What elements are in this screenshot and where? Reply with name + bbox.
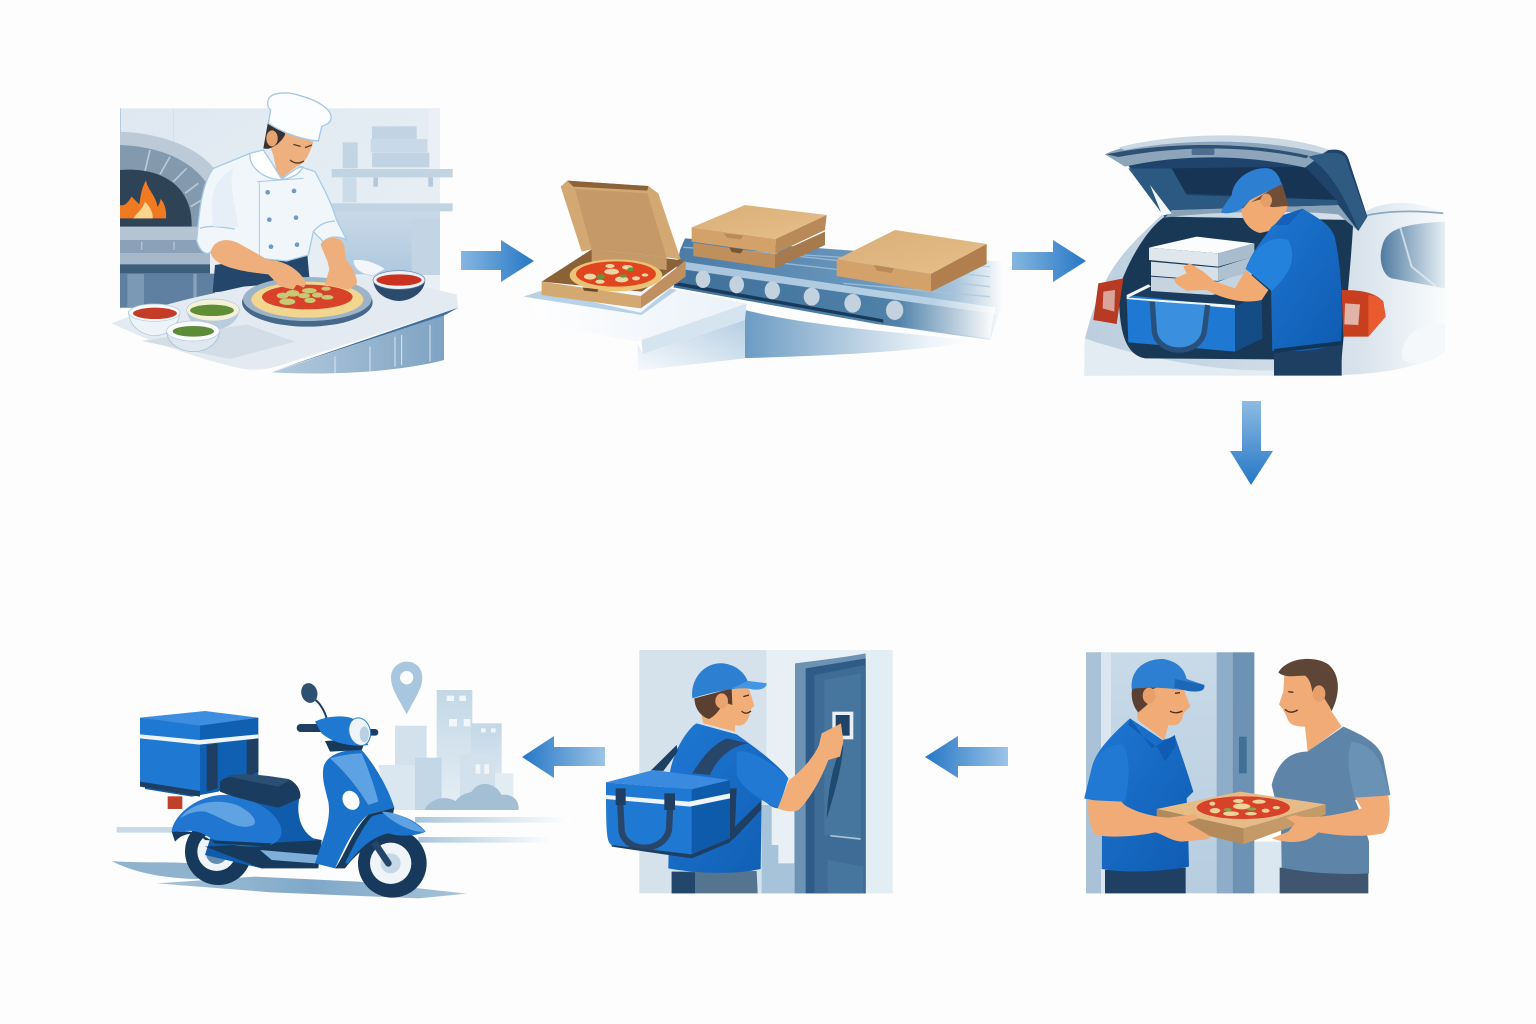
customer: [1272, 659, 1390, 893]
shirt: [1246, 209, 1342, 351]
conveyor belt: [673, 238, 1003, 340]
panel: scooter delivery: [112, 662, 572, 898]
insulated backpack bag: [606, 770, 730, 858]
open pizza box with pizza: [542, 181, 686, 308]
door with doorbell: [795, 653, 866, 893]
apron: [213, 254, 310, 292]
arrow: step 3 down to 4: [1230, 401, 1273, 485]
delivery person: [1084, 659, 1204, 893]
stack of pizza boxes: [1149, 237, 1254, 295]
arm: [1175, 263, 1268, 302]
bowls of sauce and toppings: [128, 271, 425, 352]
flames: [120, 180, 166, 218]
tail lights: [1093, 278, 1386, 337]
panel: ringing the doorbell: [606, 650, 893, 893]
pants: [1274, 343, 1342, 376]
arrow: step 1 to 2: [461, 240, 534, 282]
rear fender: [172, 795, 281, 847]
kitchen counter: [112, 260, 458, 373]
hair: [1251, 182, 1289, 207]
seat: [220, 775, 300, 808]
icon: location pin: [391, 662, 422, 714]
chef jacket: [197, 153, 347, 261]
front fender: [335, 808, 394, 868]
front wheel: [358, 829, 427, 898]
open tailgate: [1105, 135, 1367, 231]
scooter: [172, 681, 427, 898]
cap: [692, 663, 767, 698]
front mirror stem: [316, 700, 328, 723]
cap: [1221, 168, 1282, 213]
panel: handing pizza to customer: [1084, 652, 1390, 893]
car body: [1084, 203, 1445, 376]
panel: boxing pizza on conveyor: [523, 181, 1003, 371]
packing table: [523, 287, 977, 371]
arrow: step 2 to 3: [1012, 240, 1086, 282]
delivery box on scooter: [140, 711, 258, 809]
chef hat: [268, 93, 331, 141]
road lines and ground shadow: [112, 817, 572, 898]
icon: pizza oven with fire: [120, 132, 217, 308]
face and neck: [267, 127, 313, 180]
face and neck: [1242, 185, 1288, 233]
handlebars and headlight: [325, 738, 367, 752]
city skyline: [378, 690, 519, 810]
panel: loading the car trunk: [1084, 135, 1445, 376]
arms holding box: [1088, 796, 1390, 842]
arm reaching to bell: [778, 723, 843, 811]
delivery person: [651, 663, 843, 893]
insulated bag: [1127, 284, 1262, 352]
arrow: step 4 to 5: [925, 736, 1008, 778]
delivery person loading: [1175, 168, 1342, 376]
straps: [651, 745, 678, 771]
hair: [263, 120, 285, 149]
body under seat: [205, 795, 322, 868]
arrow: step 5 to 6: [522, 736, 605, 778]
closed pizza box: [692, 205, 827, 268]
chef figure: [197, 93, 347, 292]
pizza on tray: [242, 277, 373, 327]
closed pizza box on belt: [837, 230, 987, 292]
shelves with boxes: [332, 126, 453, 211]
pizza box: [1157, 792, 1326, 844]
chef arms and hands: [211, 238, 357, 290]
front shield: [315, 750, 394, 868]
panel: chef preparing pizza: [112, 93, 458, 373]
kitchen background wall: [120, 108, 440, 308]
rear wheel: [185, 818, 252, 885]
doorway background: [1086, 652, 1283, 893]
open trunk interior: [1119, 217, 1353, 360]
hallway background: [639, 650, 893, 893]
